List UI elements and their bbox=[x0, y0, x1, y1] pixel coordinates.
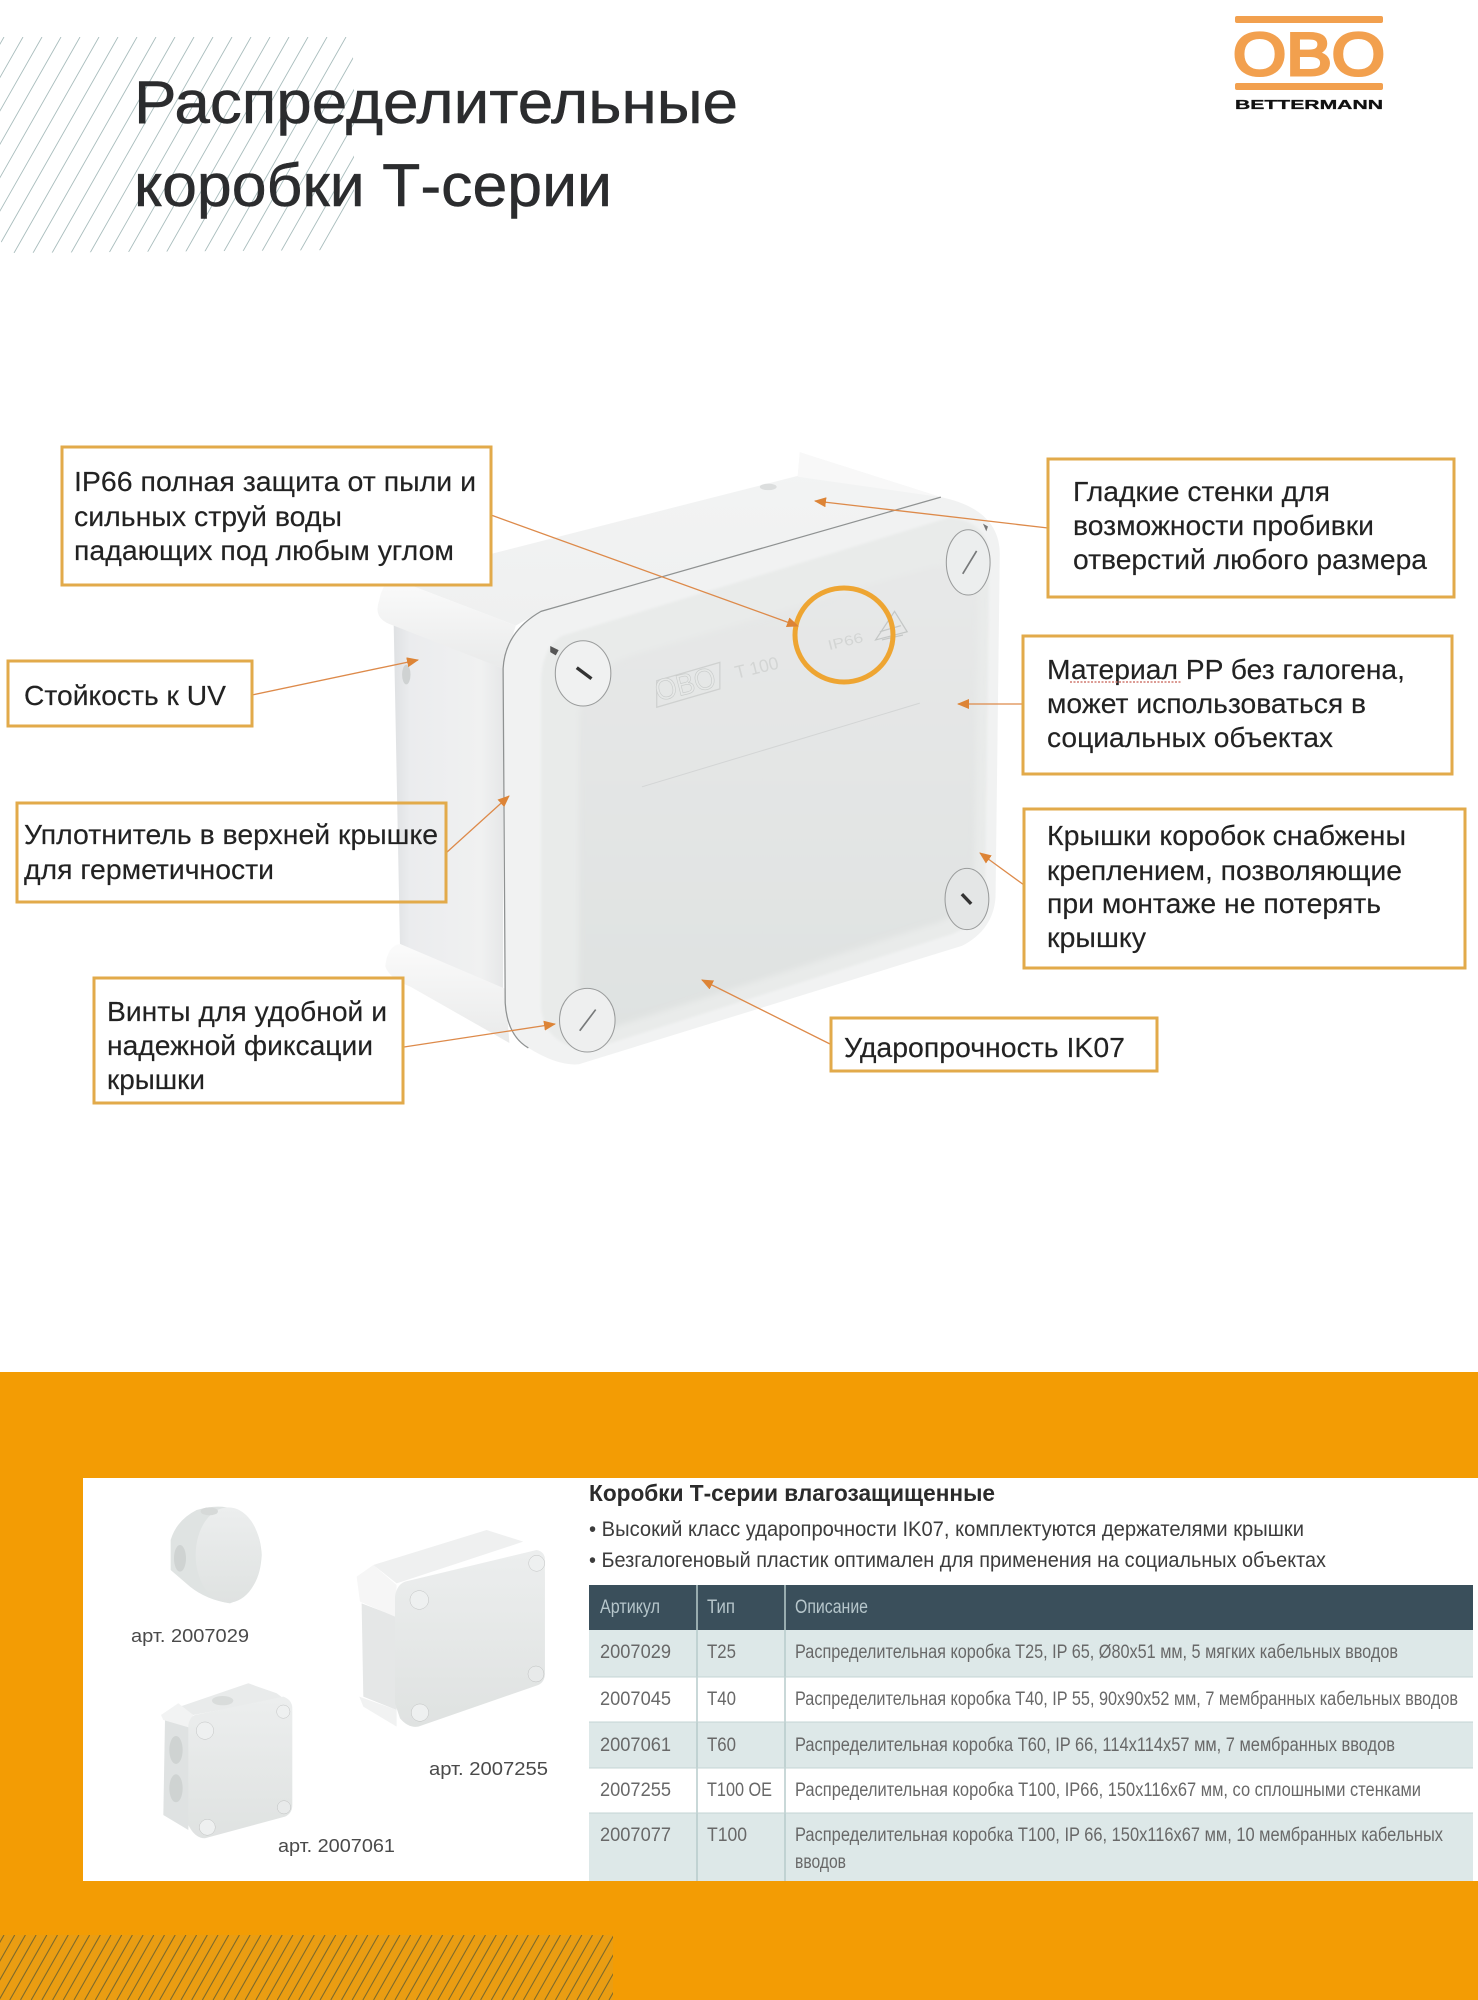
product labels: арт. 2007029 bbox=[131, 1625, 249, 1646]
title: Распределительные bbox=[134, 69, 738, 136]
callout: seal: Уплотнитель в верхней крышке bbox=[24, 819, 438, 850]
table header: Артикул bbox=[600, 1597, 660, 1618]
table row 2007061: T60 bbox=[707, 1735, 736, 1756]
decorative hatch top left bbox=[0, 37, 354, 253]
table row 2007045: T40 bbox=[707, 1689, 736, 1710]
callout: lid fastening: крышку bbox=[1047, 922, 1146, 953]
table row 2007061 bbox=[600, 1735, 1395, 1756]
feature bullets: • Высокий класс ударопрочности IK07, комплектуются держателями крышки bbox=[589, 1518, 1304, 1541]
table header: Описание bbox=[795, 1597, 868, 1618]
highlight circle on IP66 marking bbox=[795, 588, 893, 682]
product photo: T60 box bbox=[161, 1683, 292, 1838]
embossed markings on lid: OBO bbox=[651, 661, 719, 708]
table row 2007029: 2007029 bbox=[600, 1642, 671, 1663]
table row 2007029 bbox=[600, 1642, 1398, 1663]
table row 2007029: T25 bbox=[707, 1642, 736, 1663]
table row 2007077: вводов bbox=[795, 1852, 846, 1873]
table row 2007077: T100 bbox=[707, 1825, 747, 1846]
table row 2007077: 2007077 bbox=[600, 1825, 671, 1846]
table rows background bbox=[589, 1585, 1473, 1881]
table row 2007255: T100 OE bbox=[707, 1780, 772, 1801]
lid screws bbox=[402, 484, 990, 1052]
feature bullets: • Безгалогеновый пластик оптимален для применения на социальных объектах bbox=[589, 1549, 1326, 1572]
callout: smooth walls: возможности пробивки bbox=[1073, 510, 1374, 541]
table header: Тип bbox=[707, 1597, 735, 1618]
logo: OBO Bettermann: BETTERMANN bbox=[1235, 97, 1383, 112]
callout: IP66: падающих под любым углом bbox=[74, 535, 454, 566]
feature bullets bbox=[589, 1518, 1326, 1572]
table row 2007255: 2007255 bbox=[600, 1780, 671, 1801]
callout: screws bbox=[94, 978, 403, 1103]
callout: UV resistance bbox=[8, 661, 252, 726]
callout: material PP bbox=[1023, 636, 1452, 774]
arrows bbox=[252, 501, 1048, 1047]
embossed markings on lid: IP66 bbox=[826, 629, 865, 653]
title: коробки Т-серии bbox=[134, 152, 612, 219]
logo: OBO Bettermann bbox=[1233, 16, 1385, 112]
product labels: арт. 2007061 bbox=[278, 1835, 395, 1856]
product labels: арт. 2007255 bbox=[429, 1758, 548, 1779]
title bbox=[134, 69, 738, 219]
product photo: T100 OE box bbox=[357, 1530, 545, 1727]
callout: lid fastening: Крышки коробок снабжены bbox=[1047, 820, 1406, 851]
callout: lid fastening: при монтаже не потерять bbox=[1047, 888, 1381, 919]
table row 2007077 bbox=[600, 1825, 1443, 1873]
callout: impact resistance bbox=[831, 1018, 1157, 1071]
embossed markings on lid: T 100 bbox=[733, 652, 781, 683]
white product panel bbox=[83, 1478, 1478, 1881]
callout: lid fastening: креплением, позволяющие bbox=[1047, 855, 1402, 886]
callout: seal: для герметичности bbox=[24, 854, 274, 885]
orange footer band bbox=[0, 1372, 1478, 2000]
main product image: T100 junction box bbox=[377, 452, 1000, 1064]
product photo: round box T25 bbox=[171, 1507, 262, 1603]
callout: screws: Винты для удобной и bbox=[107, 996, 387, 1027]
table row 2007061: Распределительная коробка T60, IP 66, 114х114х57 мм, 7 мембранных вводов bbox=[795, 1735, 1395, 1756]
logo: OBO Bettermann: OBO bbox=[1233, 21, 1385, 88]
callout: smooth walls: отверстий любого размера bbox=[1073, 544, 1427, 575]
callout: smooth walls bbox=[1048, 459, 1454, 597]
table row 2007045: 2007045 bbox=[600, 1689, 671, 1710]
callout: IP66: IP66 полная защита от пыли и bbox=[74, 466, 476, 497]
callout: UV resistance: Стойкость к UV bbox=[24, 680, 226, 711]
callout: screws: надежной фиксации bbox=[107, 1030, 373, 1061]
decorative hatch bottom left bbox=[0, 1935, 657, 2000]
product labels bbox=[131, 1625, 548, 1856]
callout: IP66: сильных струй воды bbox=[74, 501, 342, 532]
callout: seal bbox=[17, 803, 446, 902]
callout: material PP: Материал PP без галогена, bbox=[1047, 654, 1405, 685]
callout: lid fastening bbox=[1024, 809, 1465, 968]
callout: IP66 bbox=[62, 447, 491, 585]
product table bbox=[589, 1585, 1473, 1881]
table header bbox=[600, 1597, 868, 1618]
table row 2007061: 2007061 bbox=[600, 1735, 671, 1756]
callout: material PP: социальных объектах bbox=[1047, 722, 1333, 753]
callout: material PP: может использоваться в bbox=[1047, 688, 1366, 719]
callout: screws: крышки bbox=[107, 1064, 205, 1095]
callout: impact resistance: Ударопрочность IK07 bbox=[844, 1032, 1125, 1063]
callout: smooth walls: Гладкие стенки для bbox=[1073, 476, 1330, 507]
table heading: Коробки Т-серии влагозащищенные bbox=[589, 1480, 995, 1506]
embossed markings on lid bbox=[651, 611, 907, 708]
